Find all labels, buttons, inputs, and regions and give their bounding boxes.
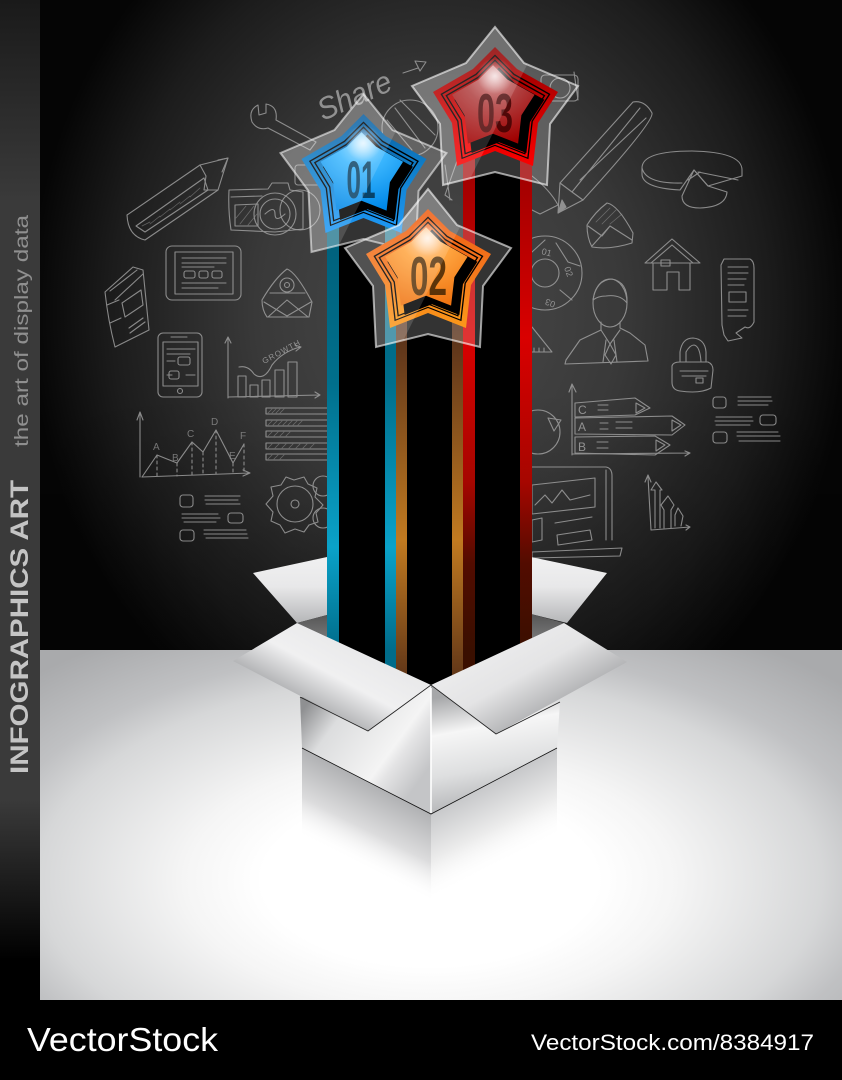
star 01 blue: 01 [346, 151, 376, 210]
glass plate [280, 94, 446, 252]
bar: orange column [396, 271, 463, 691]
number 02: 02 [410, 245, 447, 307]
doodle: share arrow [403, 61, 426, 73]
star 03 red [410, 26, 580, 186]
highlight [346, 125, 382, 161]
doodle: horizontal bars [266, 408, 328, 460]
doodle: line chart: B [172, 453, 179, 464]
doodle: line chart: C [187, 429, 194, 440]
highlight [410, 220, 446, 256]
doodle: round tool behind stars [280, 72, 578, 230]
doodle: donut chart [508, 236, 582, 310]
sidebar tagline: the art of display data [12, 214, 33, 447]
doodle label: donut 01: 01 [540, 246, 553, 259]
box front flaps [233, 623, 627, 734]
dark wall background [40, 0, 842, 650]
glass plate [412, 27, 578, 185]
number 03: 03 [477, 82, 513, 144]
doodle: person [565, 279, 648, 364]
doodle: line chart: F [240, 431, 246, 442]
doodle: book [105, 267, 149, 347]
glass plate [345, 189, 511, 347]
box reflection [302, 748, 557, 905]
doodle label: donut 03: 03 [544, 297, 557, 310]
left sidebar [0, 0, 40, 1000]
doodle: growth bar chart [225, 337, 320, 398]
doodle label: growth: GROWTH [261, 338, 302, 366]
doodle: camera [229, 183, 303, 235]
doodle: envelope right [587, 203, 633, 248]
doodle: small arrow chart [645, 475, 690, 530]
doodle: speech bubble [721, 259, 754, 341]
doodle: line chart: A [153, 442, 160, 453]
doodle: gears [266, 476, 333, 533]
doodle: pie chart [642, 151, 742, 208]
doodle label: donut 02: 02 [562, 265, 575, 278]
doodle: tablet [166, 246, 241, 300]
doodle: line chart: D [211, 417, 218, 428]
doodle: wrench [251, 104, 316, 150]
doodle: house [645, 239, 700, 290]
bar: red column [463, 109, 532, 689]
box interior [297, 614, 564, 685]
footer logo: VectorStock [27, 1021, 219, 1058]
star 01 blue [279, 92, 448, 254]
box back flaps [253, 557, 607, 685]
sidebar title: INFOGRAPHICS ART [6, 480, 34, 774]
doodle: left pencil [127, 158, 228, 240]
star 02 orange [344, 188, 512, 348]
doodle: right pencil [558, 102, 652, 213]
doodle: text list left [180, 495, 248, 541]
doodle: line chart: E [229, 451, 236, 462]
floor [40, 650, 842, 1000]
doodle label: share: Share [312, 64, 397, 127]
doodle: mail envelope [262, 269, 312, 317]
doodle labels: C A B [578, 403, 587, 454]
doodle labels: C A B: B [578, 440, 586, 454]
coloured star layers [302, 114, 426, 233]
footer url: VectorStock.com/8384917 [531, 1030, 814, 1055]
coloured star layers [433, 47, 558, 166]
doodle: line chart [137, 412, 250, 477]
gloss [281, 95, 396, 252]
doodle labels: C A B: A [578, 420, 586, 434]
gloss [346, 190, 460, 347]
footer bar [0, 1000, 842, 1080]
box front faces [300, 685, 560, 814]
highlight [477, 58, 513, 94]
doodle: cycle arrow [516, 410, 561, 454]
doodle: padlock [672, 338, 713, 392]
gloss [412, 28, 527, 184]
doodle labels: C A B: C [578, 403, 587, 417]
coloured star layers [366, 209, 491, 328]
doodle: phone [158, 333, 202, 397]
bar: blue column [327, 176, 396, 676]
doodle: laptop [532, 467, 622, 558]
doodle: arrow bar chart [569, 384, 690, 456]
chalk doodles [105, 61, 780, 558]
doodle: ruler [532, 327, 552, 352]
doodle: text list right [713, 397, 780, 443]
